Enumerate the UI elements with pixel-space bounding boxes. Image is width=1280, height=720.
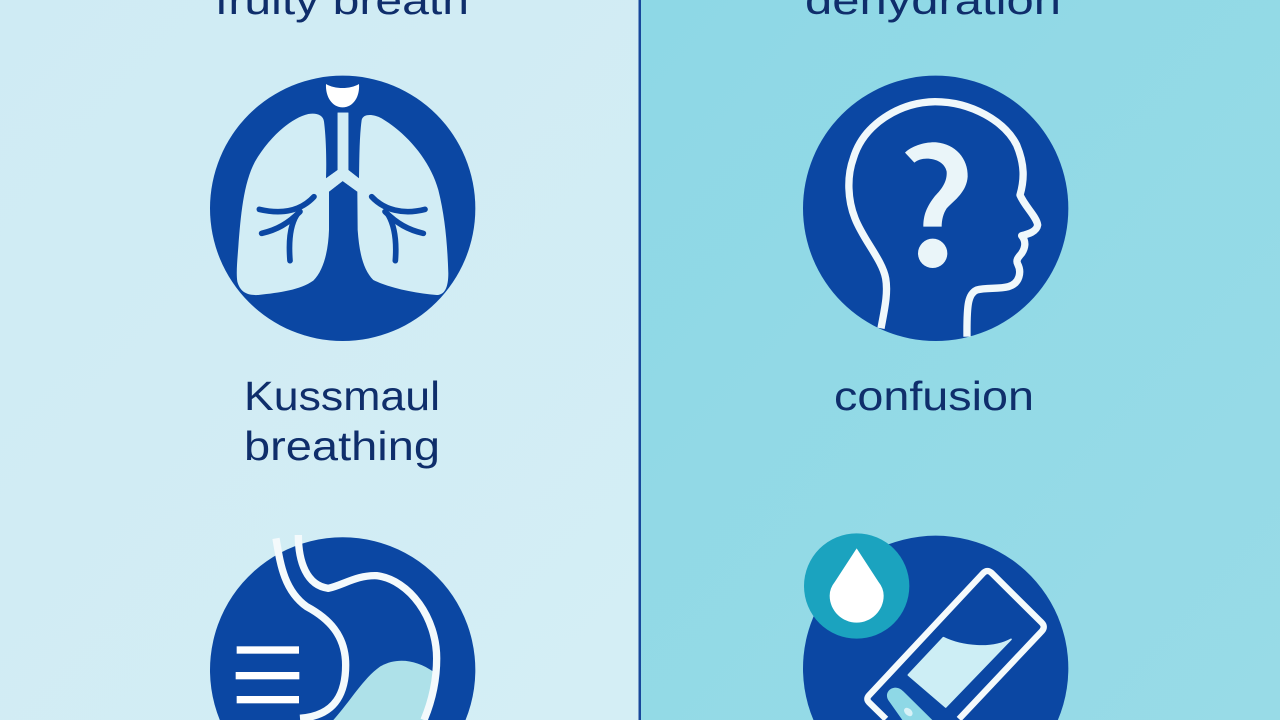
- icon: stomach: [210, 535, 475, 720]
- label: confusion: confusion: [834, 373, 1034, 419]
- icon: phone with water drop: [803, 533, 1068, 720]
- icon: head with question mark: [803, 76, 1068, 341]
- label: Kussmaul breathing: Kussmaul: [244, 373, 440, 419]
- panel: right background: [640, 0, 1280, 720]
- label: Kussmaul breathing: breathing: [244, 423, 440, 469]
- icon: lungs: [210, 76, 475, 341]
- panel: left background: [0, 0, 640, 720]
- label: Kussmaul breathing: [244, 373, 440, 469]
- center divider: [638, 0, 641, 720]
